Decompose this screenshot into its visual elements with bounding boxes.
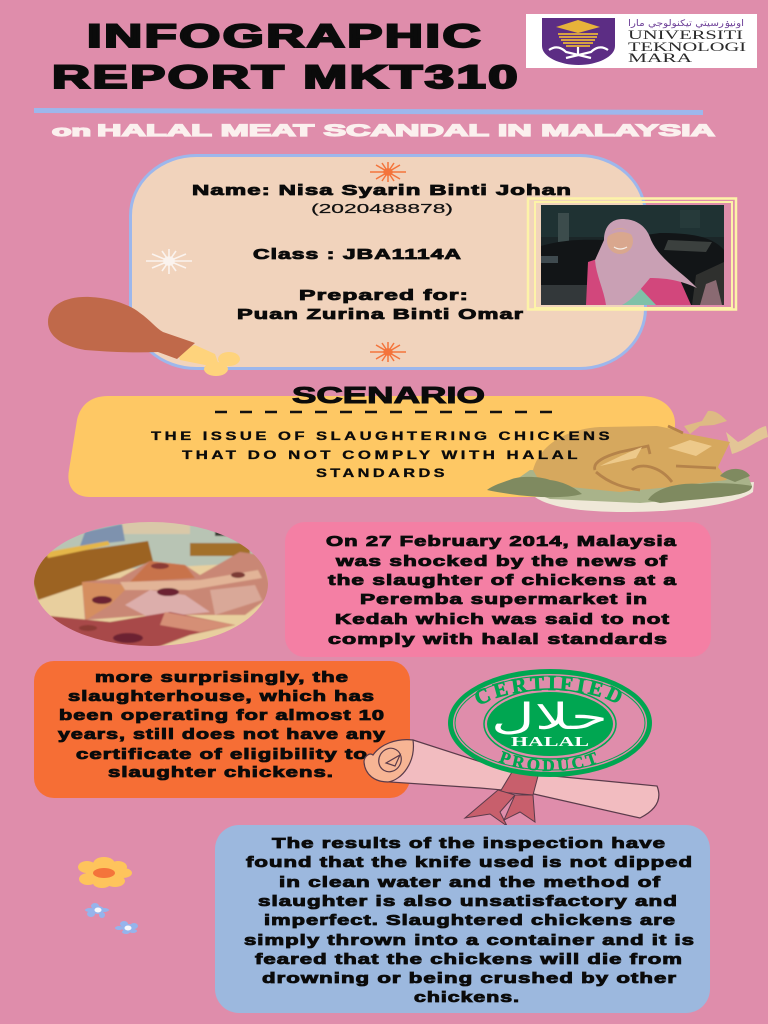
seal text: certified: CERTIFIED [475,676,622,704]
icon: orange star top [370,162,406,182]
title: REPORT MKT310 [52,59,520,95]
seal text: product: PRODUCT [498,750,596,772]
logo: Universiti Teknologi MARA [526,14,757,68]
panel: inspection results: The results of the inspection have [272,835,666,852]
scenario text: THAT DO NOT COMPLY WITH HALAL [182,450,581,462]
icon: small blue flower [85,903,109,918]
illustration: certificate scroll [364,740,659,826]
name: Name: Nisa Syarin Binti Johan [192,182,572,199]
icon: chicken drumstick [48,297,240,376]
scenario text [151,431,613,480]
prepared for: Prepared for: [299,287,469,304]
icon: halal certified seal [448,669,652,777]
panel: no certificate: been operating for almost 10 [59,708,385,724]
panel: inspection results: found that the knife used is not dipped [246,854,693,871]
lecturer: Puan Zurina Binti Omar [237,306,524,323]
university name: TEKNOLOGI [628,39,746,54]
subtitle [52,121,715,140]
icon: large orange flower [78,857,132,888]
panel: news event: Peremba supermarket in [360,591,648,608]
arabic wordmark: اونيۏرسيتي تيكنولوجي مارا [628,19,744,29]
icon: orange star bottom [370,342,406,362]
title [52,18,520,95]
arabic halal: حلال [491,697,608,738]
panel: news event: was shocked by the news of [334,553,668,570]
panel: no certificate [34,661,410,798]
panel: inspection results [215,825,710,1013]
photo of student [528,198,736,310]
subtitle: on [52,123,91,140]
university name: MARA [628,50,693,65]
panel: inspection results: in clean water and the method of [279,874,661,891]
class: Class : JBA1114A [253,246,462,263]
university name: UNIVERSITI [628,27,743,42]
icon: university crest [542,18,615,65]
scenario text: STANDARDS [316,468,448,480]
dashed divider [215,411,563,413]
panel: no certificate: slaughterhouse, which has [68,689,375,705]
panel: news event: the slaughter of chickens at a [328,572,677,589]
panel: inspection results: feared that the chickens will die from [255,951,683,968]
panel: no certificate: certificate of eligibility to [76,747,368,763]
panel: no certificate: more surprisingly, the [95,670,349,686]
heading: scenario: SCENARIO [292,382,485,408]
icon: small blue flower [115,921,138,934]
panel: inspection results: chickens. [414,989,520,1006]
scenario text: THE ISSUE OF SLAUGHTERING CHICKENS [151,431,613,443]
panel: student details [130,156,646,368]
panel: inspection results: simply thrown into a container and it is [244,932,695,949]
illustration: roast chicken on plate [487,411,768,512]
panel: inspection results: imperfect. Slaughtered chickens are [264,912,676,929]
panel: news event: comply with halal standards [328,631,668,648]
title: INFOGRAPHIC [87,18,483,54]
seal text: halal: HALAL [511,735,589,750]
panel: no certificate: years, still does not have any [58,727,386,743]
panel: news event: Kedah which was said to not [335,611,670,628]
panel: inspection results: slaughter is also unsatisfactory and [258,893,678,910]
photo: raw meat [30,518,272,650]
panel: scenario box [68,396,675,497]
panel: news event [285,522,711,657]
student id: (2020488878) [311,201,453,216]
panel: no certificate: slaughter chickens. [108,765,334,781]
subtitle: HALAL MEAT SCANDAL IN MALAYSIA [97,121,715,140]
panel: news event: On 27 February 2014, Malaysia [326,533,677,550]
icon: white star [146,249,192,274]
title underline [34,108,703,115]
panel: inspection results: drowning or being crushed by other [262,970,677,987]
university name [628,27,746,65]
